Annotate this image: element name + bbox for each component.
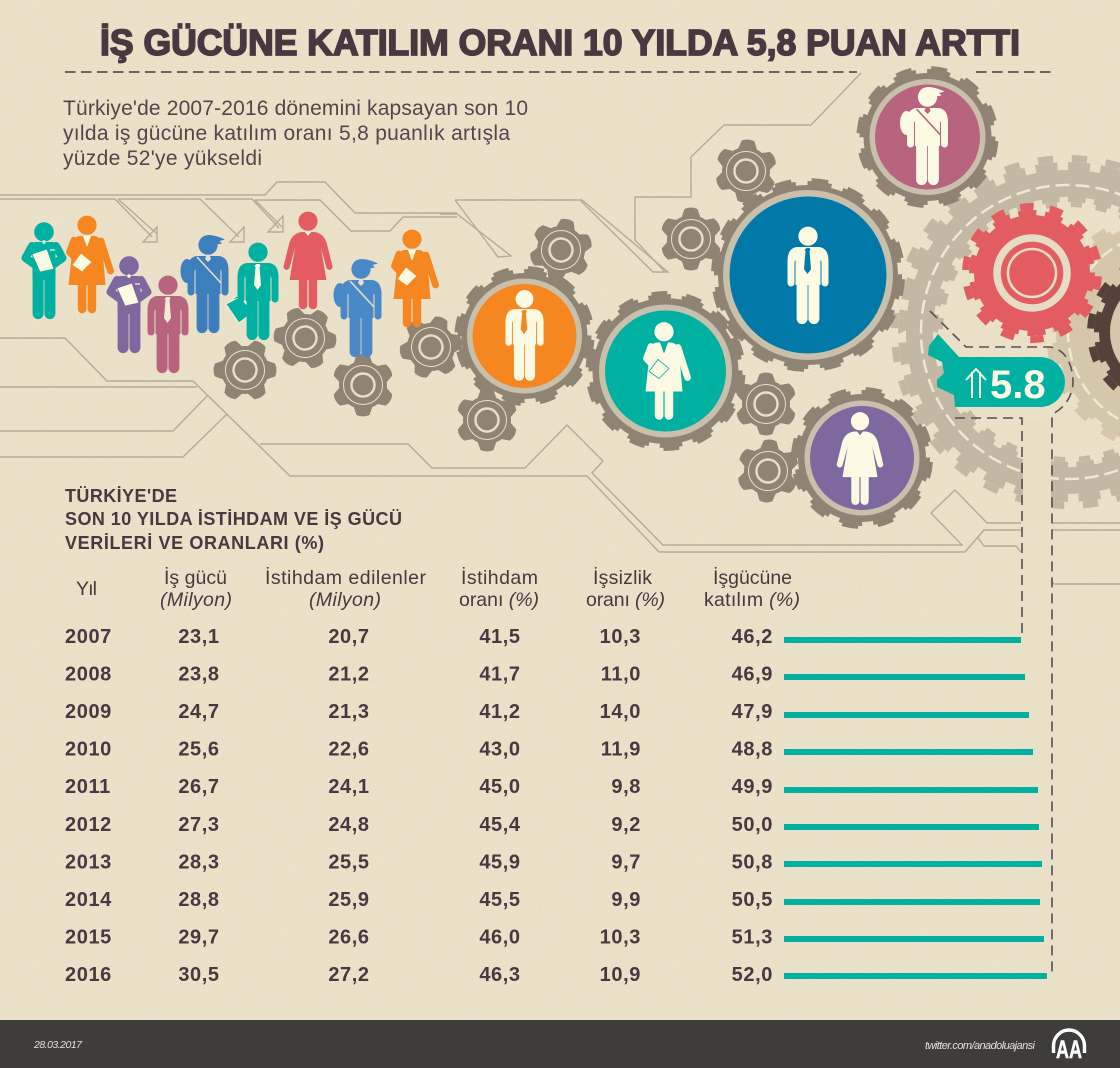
row 2013: 50,8 bbox=[732, 851, 773, 873]
row 2016: 46,3 bbox=[479, 964, 521, 986]
table column headers: İş gücü bbox=[164, 566, 227, 589]
row 2012: 2012 bbox=[65, 814, 112, 836]
row 2012: 45,4 bbox=[479, 814, 521, 836]
corridor between dashed lines bbox=[1023, 420, 1051, 520]
row 2012 bbox=[65, 814, 1039, 836]
row 2009: 24,7 bbox=[178, 701, 220, 723]
dashed connector lines bbox=[930, 311, 1073, 975]
row 2009: 14,0 bbox=[600, 701, 641, 723]
row 2016: 10,9 bbox=[600, 964, 641, 986]
title: İŞ GÜCÜNE KATILIM ORANI 10 YILDA 5,8 PUAN ARTTI bbox=[100, 22, 1020, 63]
row 2007: 23,1 bbox=[178, 626, 220, 648]
gear: dark brown bbox=[1090, 258, 1120, 406]
row 2014: 2014 bbox=[65, 889, 112, 911]
row 2013: 9,7 bbox=[611, 851, 641, 873]
row 2009: 47,9 bbox=[732, 701, 773, 723]
row 2010: 2010 bbox=[65, 739, 112, 761]
gear medallion: orange bbox=[456, 268, 592, 404]
table column headers: İstihdam bbox=[461, 566, 538, 589]
row 2011: 49,9 bbox=[732, 776, 773, 798]
row 2014: 45,5 bbox=[479, 889, 521, 911]
row 2009 bbox=[65, 701, 1029, 723]
table column headers bbox=[76, 566, 800, 611]
row 2008: 2008 bbox=[65, 664, 112, 686]
row 2007: 41,5 bbox=[479, 626, 521, 648]
table column headers: (Milyon) bbox=[160, 589, 232, 611]
row 2008 bbox=[65, 664, 1025, 686]
gear medallion: teal bbox=[588, 293, 744, 449]
row 2010: 43,0 bbox=[479, 739, 521, 761]
people group bbox=[26, 212, 436, 373]
row 2011: 45,0 bbox=[479, 776, 521, 798]
footer bar bbox=[0, 1020, 1120, 1068]
row 2014: 28,8 bbox=[178, 889, 220, 911]
row 2013 bbox=[65, 851, 1042, 873]
table column headers: İşgücüne bbox=[713, 566, 792, 589]
row 2007: 46,2 bbox=[732, 626, 773, 648]
row 2007: 10,3 bbox=[600, 626, 641, 648]
row 2010: 48,8 bbox=[732, 739, 773, 761]
row 2012: 27,3 bbox=[178, 814, 220, 836]
row 2010: 22,6 bbox=[328, 739, 370, 761]
gear medallion: blue bbox=[713, 180, 903, 370]
row 2013: 28,3 bbox=[178, 851, 220, 873]
badge: up 5.8 bbox=[928, 334, 1065, 407]
table column headers: (Milyon) bbox=[309, 589, 381, 611]
gear: red bbox=[966, 206, 1098, 340]
row 2010: 25,6 bbox=[178, 739, 220, 761]
row 2007: 2007 bbox=[65, 626, 112, 648]
intro text: Türkiye'de 2007-2016 dönemini kapsayan son 10 bbox=[63, 97, 528, 120]
briefcase bbox=[226, 296, 253, 323]
table column headers: Yıl bbox=[76, 578, 97, 600]
row 2015: 2015 bbox=[65, 926, 112, 948]
row 2011: 24,1 bbox=[328, 776, 370, 798]
row 2008: 23,8 bbox=[178, 664, 220, 686]
row 2015: 46,0 bbox=[479, 926, 521, 948]
row 2016: 27,2 bbox=[328, 964, 370, 986]
row 2008: 46,9 bbox=[732, 664, 773, 686]
row 2015: 10,3 bbox=[600, 926, 641, 948]
footer date: 28.03.2017 bbox=[33, 1039, 83, 1051]
table column headers: oranı (%) bbox=[459, 589, 539, 611]
row 2014: 50,5 bbox=[732, 889, 773, 911]
row 2010 bbox=[65, 739, 1033, 761]
row 2015: 29,7 bbox=[178, 926, 220, 948]
table column headers: İstihdam edilenler bbox=[265, 566, 426, 589]
row 2015 bbox=[65, 926, 1044, 948]
circuit lines background bbox=[0, 73, 1120, 584]
small gears bbox=[201, 137, 802, 505]
row 2013: 25,5 bbox=[328, 851, 370, 873]
badge: up 5.8: 5.8 bbox=[990, 363, 1046, 407]
large background gears bbox=[894, 158, 1120, 520]
table rows with bars bbox=[65, 626, 1047, 986]
gear: tan bbox=[1049, 213, 1120, 451]
row 2008: 41,7 bbox=[479, 664, 521, 686]
row 2011 bbox=[65, 776, 1038, 798]
row 2009: 2009 bbox=[65, 701, 112, 723]
row 2016: 30,5 bbox=[178, 964, 220, 986]
row 2014: 9,9 bbox=[611, 889, 641, 911]
intro text: yılda iş gücüne katılım oranı 5,8 puanlık artışla bbox=[63, 122, 510, 145]
row 2010: 11,9 bbox=[601, 739, 641, 761]
gear: pale outer ring bbox=[894, 158, 1120, 506]
table heading bbox=[65, 486, 402, 553]
row 2016: 52,0 bbox=[732, 964, 773, 986]
row 2014: 25,9 bbox=[328, 889, 370, 911]
table heading: TÜRKİYE'DE bbox=[65, 486, 177, 506]
table heading: SON 10 YILDA İSTİHDAM VE İŞ GÜCÜ bbox=[65, 509, 402, 529]
row 2009: 41,2 bbox=[479, 701, 521, 723]
table column headers: oranı (%) bbox=[586, 589, 665, 611]
row 2013: 2013 bbox=[65, 851, 112, 873]
row 2011: 26,7 bbox=[178, 776, 220, 798]
AA logo bbox=[1054, 1030, 1084, 1064]
row 2012: 9,2 bbox=[611, 814, 641, 836]
row 2016 bbox=[65, 964, 1047, 986]
row 2015: 26,6 bbox=[328, 926, 370, 948]
row 2011: 2011 bbox=[65, 776, 111, 798]
gear medallion: purple bbox=[793, 389, 931, 527]
row 2011: 9,8 bbox=[611, 776, 641, 798]
row 2014 bbox=[65, 889, 1040, 911]
row 2016: 2016 bbox=[65, 964, 112, 986]
intro text bbox=[63, 97, 528, 170]
row 2009: 21,3 bbox=[328, 701, 370, 723]
title divider bbox=[65, 71, 1056, 73]
row 2013: 45,9 bbox=[479, 851, 521, 873]
intro text: yüzde 52'ye yükseldi bbox=[63, 147, 262, 170]
footer twitter handle: twitter.com/anadoluajansi bbox=[925, 1040, 1036, 1052]
row 2007 bbox=[65, 626, 1021, 648]
row 2012: 24,8 bbox=[328, 814, 370, 836]
row 2008: 21,2 bbox=[328, 664, 370, 686]
row 2015: 51,3 bbox=[732, 926, 773, 948]
table column headers: katılım (%) bbox=[704, 589, 800, 611]
gear medallion: mauve bbox=[858, 68, 996, 206]
row 2007: 20,7 bbox=[328, 626, 370, 648]
table column headers: İşsizlik bbox=[593, 566, 652, 589]
row 2012: 50,0 bbox=[732, 814, 773, 836]
AA logo: AA bbox=[1056, 1036, 1082, 1064]
table heading: VERİLERİ VE ORANLARI (%) bbox=[65, 533, 324, 553]
row 2008: 11,0 bbox=[601, 664, 641, 686]
